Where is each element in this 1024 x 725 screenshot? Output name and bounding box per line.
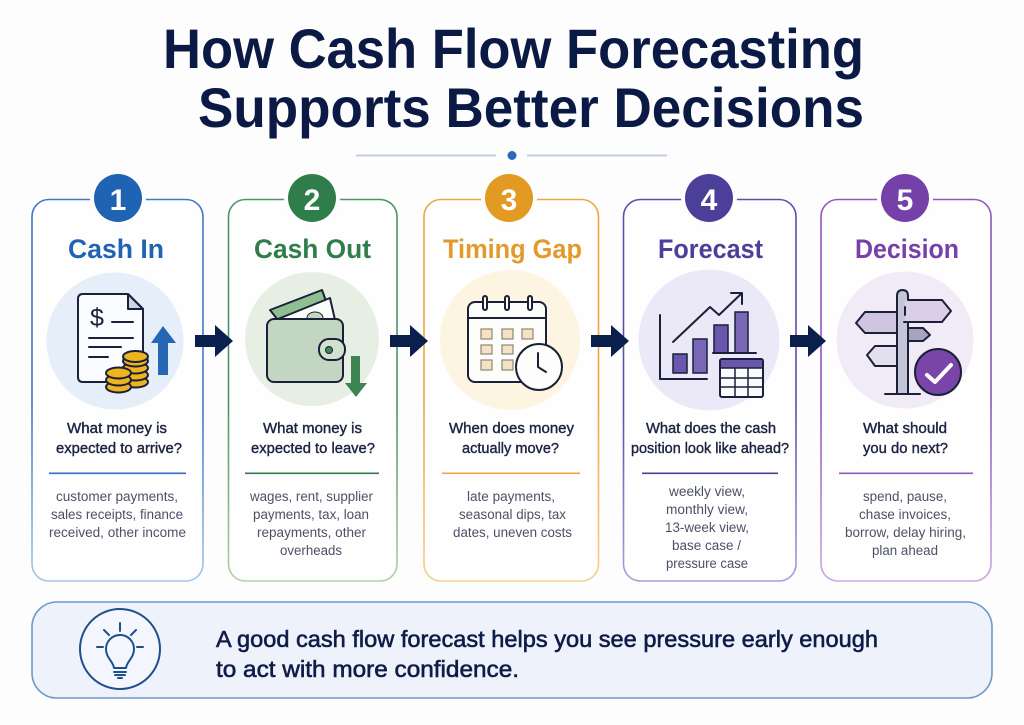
icon: wallet with down arrow [245,272,379,406]
examples: pressure case [666,556,748,571]
title: How Cash Flow Forecasting [163,17,864,80]
arrow: forecast to decision [790,325,826,357]
step badge 4 [685,174,733,222]
step badge 2 [288,174,336,222]
callout text [216,626,878,682]
question: What does the cash [646,420,776,437]
examples: wages, rent, supplier [249,489,373,504]
callout banner [32,602,992,698]
question [863,420,948,457]
question: actually move? [462,440,559,457]
panel: timing gap [424,170,598,581]
question: expected to arrive? [56,440,182,457]
arrow: timing gap to forecast [591,325,629,357]
question [631,420,789,457]
icon: bar chart, trend arrow and table [638,270,780,410]
step badge 2: 2 [304,184,320,217]
question: What money is [263,420,362,437]
panel: forecast [624,170,796,581]
callout text: A good cash flow forecast helps you see pressure early enough [216,626,878,652]
examples: received, other income [49,525,186,540]
heading: timing gap: Timing Gap [443,234,582,264]
icon: invoice, coins and up arrow [46,272,184,410]
step badge 5 [881,174,929,222]
examples [665,484,749,571]
title [163,17,864,139]
examples: spend, pause, [863,489,947,504]
examples: base case / [672,538,741,553]
question: When does money [449,420,574,437]
title divider [356,151,667,160]
icon: lightbulb [80,609,160,689]
examples: plan ahead [872,543,938,558]
examples: late payments, [467,489,555,504]
examples: monthly view, [666,502,748,517]
examples: borrow, delay hiring, [845,525,966,540]
examples: overheads [280,543,342,558]
step badge 4: 4 [701,184,718,217]
icon: calendar and clock [440,270,580,410]
callout text: to act with more confidence. [216,656,519,682]
examples [845,489,966,558]
examples: payments, tax, loan [253,507,369,522]
question: What money is [67,420,167,437]
examples: sales receipts, finance [51,507,183,522]
examples: customer payments, [56,489,178,504]
heading: cash in: Cash In [68,234,164,264]
examples [49,489,186,540]
step badge 1 [94,174,142,222]
step badge 3: 3 [501,184,517,217]
question: What should [863,420,947,437]
question [449,420,574,457]
icon: signpost with check [836,272,974,408]
step badge 5: 5 [897,184,913,217]
examples: chase invoices, [859,507,951,522]
examples: dates, uneven costs [453,525,572,540]
question [251,420,375,457]
examples [249,489,373,558]
panel: cash in [32,170,203,581]
arrow: cash in to cash out [195,325,233,357]
question: position look like ahead? [631,440,789,457]
examples: seasonal dips, tax [459,507,566,522]
question: expected to leave? [251,440,375,457]
examples: 13-week view, [665,520,749,535]
arrow: cash out to timing gap [390,325,428,357]
step badge 1: 1 [110,184,126,217]
heading: forecast: Forecast [658,234,763,264]
question [56,420,182,457]
panel: decision [821,170,991,581]
heading: cash out: Cash Out [254,234,371,264]
icon: invoice, coins and up arrow: $ [90,304,104,332]
heading: decision: Decision [855,234,959,264]
question: you do next? [863,440,948,457]
examples [453,489,572,540]
step badge 3 [485,174,533,222]
examples: repayments, other [257,525,366,540]
examples: weekly view, [668,484,745,499]
panel: cash out [228,170,397,581]
title: Supports Better Decisions [198,76,864,139]
